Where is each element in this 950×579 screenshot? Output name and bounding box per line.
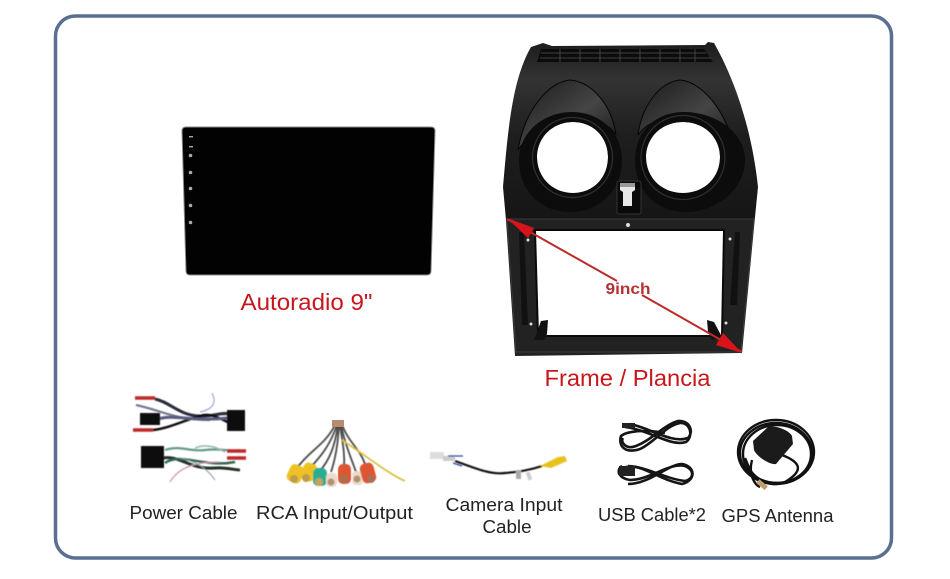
accessory: GPS antenna bbox=[738, 420, 814, 490]
label: Frame / Plancia: Frame / Plancia bbox=[544, 365, 711, 391]
label: Camera Input Cable bbox=[446, 495, 562, 537]
gauge bezels bbox=[519, 112, 622, 212]
label: RCA Input/Output: RCA Input/Output bbox=[256, 503, 413, 523]
air vent bbox=[537, 49, 713, 62]
inner frame bbox=[507, 219, 754, 352]
accessory: RCA cable bbox=[285, 420, 405, 487]
label: Power Cable: Power Cable bbox=[130, 503, 238, 523]
gauge teardrop left bbox=[518, 80, 616, 150]
gauge teardrop right bbox=[638, 80, 735, 150]
label: Camera Input Cable: Camera Input bbox=[446, 495, 562, 515]
label: GPS Antenna: GPS Antenna bbox=[722, 506, 835, 526]
product: mounting frame with 9 inch diagonal bbox=[503, 42, 758, 356]
product: car radio 9 inch bbox=[182, 127, 435, 275]
accessory: USB cables bbox=[619, 421, 693, 484]
label: Camera Input Cable: Cable bbox=[482, 517, 532, 537]
label: Autoradio 9": Autoradio 9" bbox=[240, 289, 372, 315]
accessory: power cable bbox=[133, 393, 246, 482]
accessory: camera input cable bbox=[430, 452, 567, 480]
label: 9inch: 9inch bbox=[606, 281, 650, 298]
label: USB Cable*2: USB Cable*2 bbox=[598, 505, 706, 525]
center clip bbox=[617, 181, 641, 214]
arrow: diagonal bbox=[507, 218, 742, 353]
lower clips bbox=[534, 320, 548, 340]
